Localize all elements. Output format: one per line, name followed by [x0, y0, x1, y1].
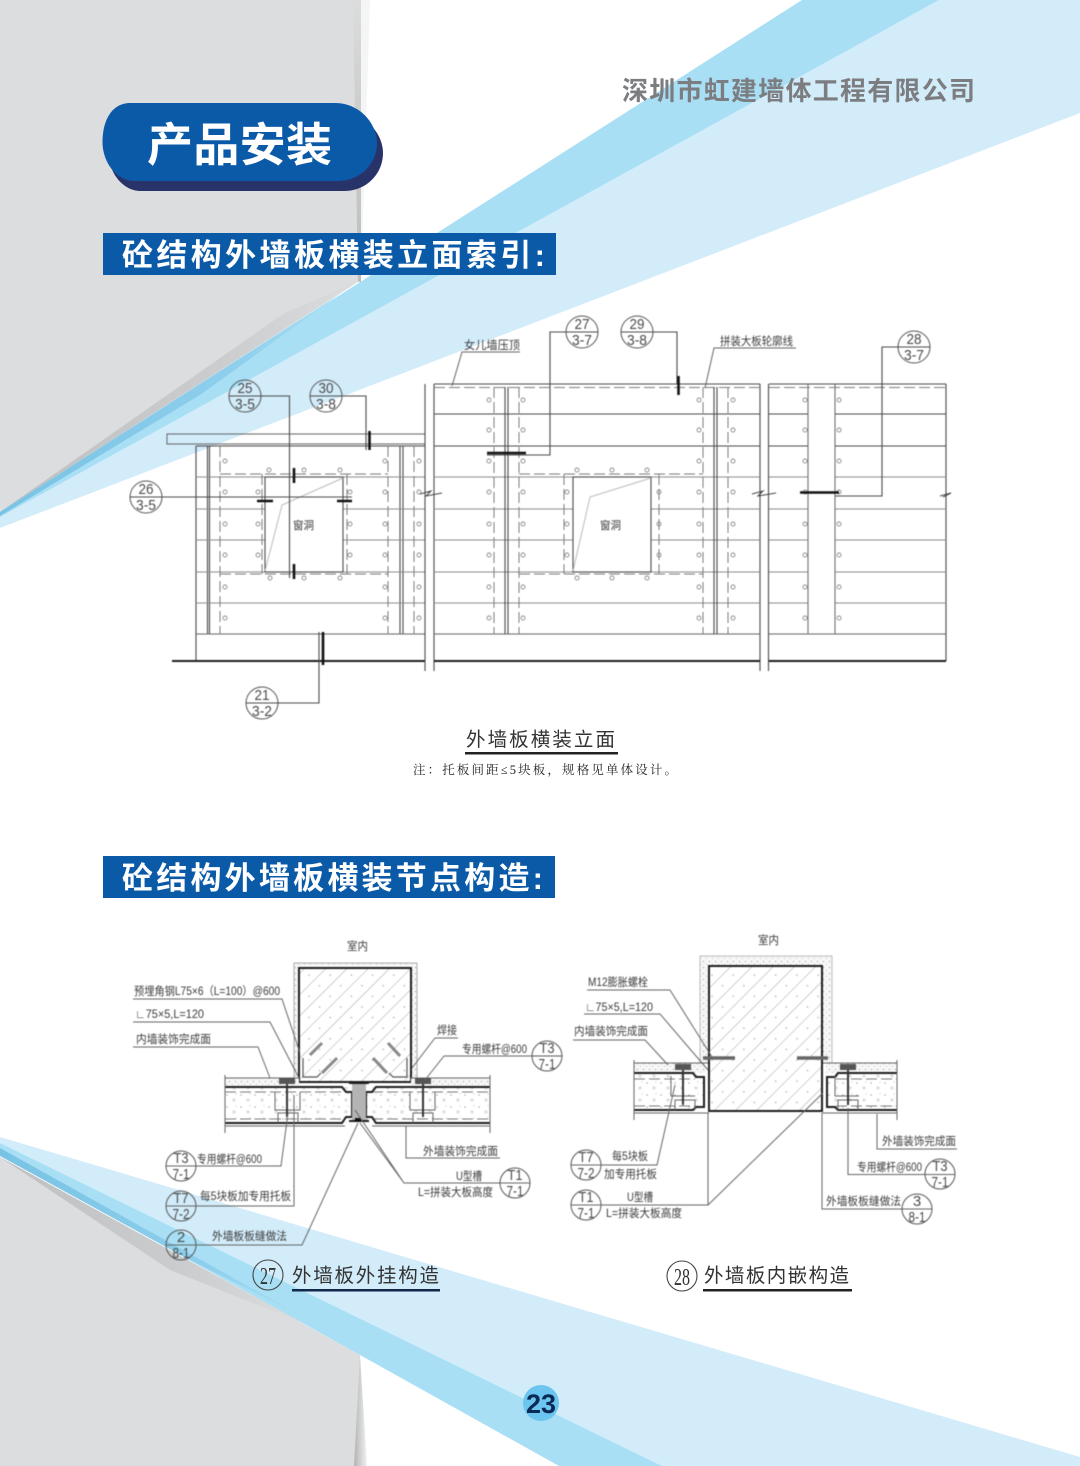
callout 26: 3-5	[136, 497, 156, 514]
label: weld	[412, 1023, 458, 1068]
label: angle: ∟75×5,L=120	[585, 1002, 653, 1014]
label: support plate	[571, 1085, 675, 1182]
label: expansion bolt: M12膨胀螺栓	[588, 975, 648, 989]
break symbols	[420, 491, 951, 497]
label: panel joint	[166, 1123, 358, 1262]
callout 25: 25	[238, 380, 252, 397]
callout 30	[310, 380, 370, 450]
label: parapet coping: 女儿墙压顶	[464, 338, 520, 352]
label: support plate: 7-2	[578, 1165, 594, 1182]
label: bolt T3	[848, 1108, 955, 1191]
label: panel joint: 外墙板板缝做法	[212, 1229, 287, 1243]
page number: 23	[526, 1389, 556, 1419]
label: interior finish	[133, 1032, 270, 1078]
label: support plate: T7	[578, 1149, 594, 1166]
heading: elevation index: 砼结构外墙板横装立面索引:	[122, 238, 545, 273]
callout 28: 28	[906, 331, 922, 348]
company name: 深圳市虹建墙体工程有限公司	[622, 76, 975, 106]
label: panel joint: 8-1	[908, 1209, 926, 1226]
callout 27: 27	[574, 316, 590, 333]
node 27 detail: 室内	[347, 939, 368, 953]
elevation note: 注：托板间距≤5块板，规格见单体设计。	[413, 762, 677, 777]
callout 21: 3-2	[252, 703, 272, 720]
label: exterior finish: 外墙装饰完成面	[882, 1134, 956, 1148]
elevation drawing	[130, 316, 951, 720]
background: bottom blue stripes and grey panel	[0, 1137, 1080, 1466]
callout 28	[800, 331, 930, 496]
label: exterior finish: 外墙装饰完成面	[423, 1144, 498, 1158]
label: panel joint: 8-1	[172, 1245, 190, 1262]
label: exterior finish	[406, 1126, 500, 1158]
wall panels	[634, 1060, 897, 1120]
label: U channel T1: T1	[508, 1167, 522, 1184]
label: bolt T3: 专用螺杆@600	[857, 1160, 922, 1174]
node 27 title	[253, 1260, 440, 1292]
callout 25	[229, 380, 294, 579]
callout 27: 3-7	[572, 332, 592, 349]
section badge: product installation	[102, 103, 383, 191]
label: U channel T1: L=拼装大板高度	[418, 1185, 493, 1199]
column section	[700, 956, 832, 1111]
label: bolt T3 left: 专用螺杆@600	[197, 1152, 262, 1166]
label: interior finish: 内墙装饰完成面	[574, 1024, 648, 1038]
bolts	[671, 1064, 859, 1110]
callout 21	[246, 632, 323, 720]
parapet and left wall outline	[167, 434, 425, 661]
heading: node details: 砼结构外墙板横装节点构造:	[122, 861, 543, 896]
label: support plate: 加专用托板	[604, 1167, 657, 1181]
label: interior finish	[573, 1024, 668, 1065]
U channel joint	[349, 1083, 369, 1122]
label: U channel T1	[571, 1093, 823, 1222]
node 28 title: 28	[674, 1265, 690, 1291]
label: U channel T1: U型槽	[456, 1169, 482, 1183]
label: bolt T3: T3	[932, 1158, 948, 1175]
node 27 title: 27	[260, 1264, 276, 1290]
label: bolt T3 left	[166, 1113, 288, 1183]
label: support plate: T7	[174, 1190, 188, 1207]
label: support plate	[166, 1095, 294, 1223]
node 27 title: 外墙板外挂构造	[292, 1265, 439, 1287]
callout 25: 3-5	[235, 396, 255, 413]
label: interior finish: 内墙装饰完成面	[136, 1032, 211, 1046]
column section	[294, 963, 417, 1082]
label: panel joint: 2	[177, 1229, 185, 1246]
label: bolt T3 right: 7-1	[538, 1056, 556, 1073]
label: bolt T3 right: 专用螺杆@600	[462, 1042, 527, 1056]
label: bolt T3 left: 7-1	[172, 1166, 190, 1183]
section badge: product installation: 产品安装	[147, 119, 332, 171]
label: panel joint: 3	[913, 1193, 921, 1210]
label: U channel T1: L=拼装大板高度	[606, 1206, 682, 1220]
callout 21: 21	[254, 687, 270, 704]
label: weld: 焊接	[437, 1023, 457, 1037]
label: U channel T1: 7-1	[506, 1183, 524, 1200]
wall panels	[225, 1075, 490, 1133]
label: bolt T3 right	[425, 1040, 562, 1080]
callout 30: 3-8	[316, 396, 336, 413]
label: bolt T3: 7-1	[932, 1174, 948, 1191]
label: angle: ∟75×5,L=120	[135, 1009, 204, 1021]
callout 29: 3-8	[627, 332, 647, 349]
callout 26	[130, 481, 352, 514]
label: U channel T1	[355, 1110, 530, 1200]
label: embedded angle	[133, 985, 300, 1053]
label: bolt T3 left: T3	[174, 1150, 188, 1167]
node 28 title	[667, 1261, 852, 1292]
callout 26: 26	[138, 481, 154, 498]
label: panel joint: 外墙板板缝做法	[826, 1194, 901, 1208]
label: angle	[133, 1009, 299, 1078]
elevation title: 外墙板横装立面	[466, 729, 615, 751]
label: panel outline	[705, 334, 796, 388]
label: bolt T3 right: T3	[540, 1040, 554, 1057]
label: panel joint	[822, 1113, 932, 1226]
callout 30: 30	[318, 380, 334, 397]
page number	[523, 1385, 559, 1421]
label: support plate: 每5块板	[612, 1149, 648, 1163]
middle wall section	[425, 384, 946, 671]
window opening left: 窗洞	[293, 518, 314, 532]
label: parapet coping	[452, 338, 520, 386]
label: U channel T1: T1	[578, 1189, 594, 1206]
node 28 title: 外墙板内嵌构造	[704, 1265, 849, 1287]
label: U channel T1: U型槽	[627, 1190, 653, 1204]
label: angle	[584, 1002, 708, 1070]
node 27 detail	[133, 939, 562, 1262]
node 28 detail: 室内	[758, 933, 779, 947]
callout 28: 3-7	[904, 347, 924, 364]
callout 29	[621, 316, 678, 395]
window opening right: 窗洞	[600, 518, 621, 532]
label: support plate: 7-2	[172, 1206, 190, 1223]
label: exterior finish	[877, 1114, 957, 1149]
node 28 detail	[571, 933, 957, 1226]
label: U channel T1: 7-1	[578, 1205, 594, 1222]
callout 27	[487, 316, 598, 455]
window opening right	[565, 468, 661, 580]
background: top blue stripes and grey panel	[0, 0, 1080, 528]
callout 29: 29	[630, 316, 644, 333]
label: embedded angle: 预埋角钢L75×6（L=100）@600	[134, 985, 280, 998]
label: panel outline: 拼装大板轮廓线	[720, 334, 793, 348]
label: expansion bolt	[587, 975, 712, 1057]
bolts	[275, 1078, 435, 1123]
window opening left	[256, 468, 352, 580]
label: support plate: 每5块板加专用托板	[200, 1189, 291, 1203]
